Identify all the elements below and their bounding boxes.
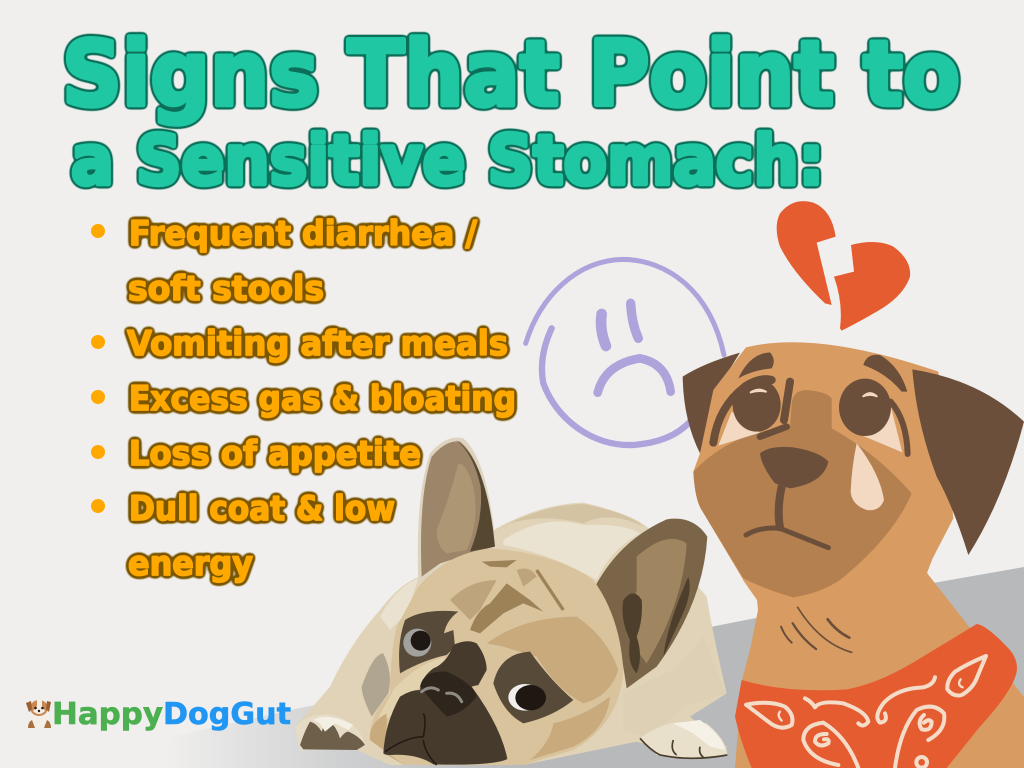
body shading <box>497 504 643 530</box>
eye highlights <box>750 389 767 393</box>
right pupil <box>515 685 546 710</box>
icon: sad face sketch <box>526 259 724 445</box>
title line 2: a Sensitive Stomach: <box>71 121 824 201</box>
bullet 4 <box>91 445 105 459</box>
bandana <box>735 607 1017 768</box>
muzzle tan strip <box>472 685 522 764</box>
item: dull coat: Dull coat & low <box>129 489 395 529</box>
eye whites <box>718 412 760 446</box>
shoulder highlight <box>380 578 418 630</box>
item: soft stools: soft stools <box>128 269 324 309</box>
logo <box>26 697 291 732</box>
bullet 5 <box>91 499 105 513</box>
cheek patch <box>487 617 618 703</box>
left ear <box>418 438 496 583</box>
bullet 2 <box>91 335 105 349</box>
right eye patch <box>493 652 573 723</box>
neck wrinkles <box>781 607 852 652</box>
item: appetite: Loss of appetite <box>129 434 421 474</box>
tear <box>851 443 884 510</box>
wordmark: DogGut: DogGut <box>163 697 291 732</box>
head <box>370 548 623 765</box>
muzzle <box>383 641 508 765</box>
icon: broken heart <box>777 201 910 331</box>
eye lids and brows <box>713 379 908 454</box>
symptom list <box>91 214 516 584</box>
head <box>683 342 1024 597</box>
bullet 3 <box>91 390 105 404</box>
cheek fold under muzzle <box>370 713 403 764</box>
face <box>693 342 953 580</box>
title line 1: Signs That Point to <box>62 22 960 127</box>
floor <box>165 567 1024 768</box>
illustration: french bulldog <box>295 438 727 765</box>
nose <box>760 447 828 488</box>
body <box>295 503 727 765</box>
left eye patch <box>399 611 458 673</box>
lower-left tan fold <box>373 657 447 727</box>
icon: puppy <box>26 700 51 728</box>
bandana pattern <box>746 656 986 768</box>
chin fold <box>385 713 437 765</box>
forehead markings <box>450 560 563 633</box>
right eye <box>839 379 891 436</box>
nostrils <box>422 688 462 702</box>
nose <box>420 672 477 717</box>
right ear <box>912 369 1024 555</box>
left paw <box>295 714 366 751</box>
flank patch <box>362 653 390 717</box>
bullet 1 <box>91 224 105 238</box>
left eye <box>403 629 431 657</box>
mouth <box>746 487 828 548</box>
neck and body <box>735 560 1024 768</box>
left eye <box>733 378 781 432</box>
left ear <box>683 353 740 453</box>
right ear <box>595 519 707 688</box>
back highlight <box>503 521 640 580</box>
muzzle <box>693 390 912 597</box>
item: vomiting: Vomiting after meals <box>127 324 508 364</box>
item: gas and bloating: Excess gas & bloating <box>129 379 516 419</box>
item: energy: energy <box>128 544 253 584</box>
right paw <box>640 720 727 758</box>
title <box>62 22 960 201</box>
wordmark: Happy: Happy <box>52 697 163 732</box>
right eye <box>508 684 542 711</box>
illustration: sad pug with bandana <box>683 342 1024 768</box>
item: frequent diarrhea: Frequent diarrhea / <box>129 214 478 254</box>
left pupil <box>411 631 431 651</box>
